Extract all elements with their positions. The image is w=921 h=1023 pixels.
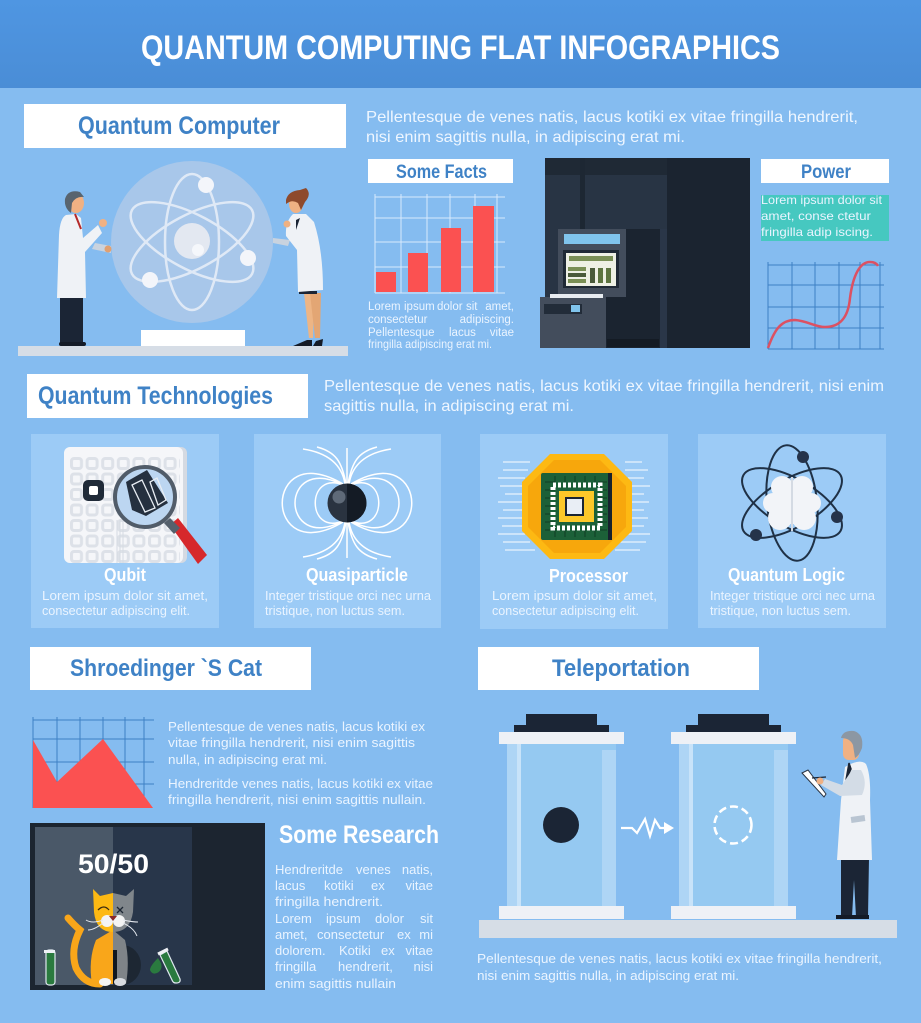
illustration: teleportation chambers (479, 714, 897, 938)
line chart: power (768, 262, 884, 349)
text: some facts: lacus (449, 327, 476, 339)
text: some research: venes (356, 862, 391, 877)
panel: qubit (31, 434, 219, 628)
text: technologies intro (324, 378, 884, 415)
text: some research: fringilla hendrerit. (275, 894, 383, 909)
icon: half alive cat (68, 889, 141, 986)
text: quantum computer intro: Pellentesque de venes natis, lacus kotiki ex vitae fringilla hendrerit, (366, 109, 858, 126)
text: qubit description: Lorem ipsum dolor sit amet, (42, 588, 208, 603)
heading: Some Facts: Some Facts (396, 162, 487, 183)
text: some research: enim sagittis nullain (275, 976, 396, 991)
text: some research: vitae (406, 943, 433, 958)
text: some research: vitae (406, 878, 433, 893)
text: quantum logic description: Integer tristique orci nec urna (710, 588, 876, 603)
text: some research: ex (371, 878, 385, 893)
heading: Teleportation (478, 647, 759, 690)
text: some research: ex (397, 927, 411, 942)
heading: Some Research: Some Research (279, 821, 439, 849)
text: technologies intro: sagittis nulla, in adipiscing erat mi. (324, 398, 574, 415)
chamber with particle (499, 714, 624, 919)
text: some facts: sit (466, 301, 478, 313)
text: some research: ex (381, 943, 395, 958)
text: cat description: vitae fringilla hendrerit, nisi enim sagittis (168, 735, 416, 750)
callout: power text (761, 193, 889, 241)
heading: Quantum Technologies (27, 374, 308, 418)
text: quantum logic description (710, 588, 876, 618)
text: some facts: Pellentesque (368, 327, 434, 339)
text: quantum computer intro: nisi enim sagittis nulla, in adipiscing erat mi. (366, 129, 685, 146)
illustration: quantum machine (540, 158, 750, 348)
text: some facts: consectetur (368, 314, 428, 326)
text: some facts: amet, (485, 301, 514, 313)
text: qubit description (42, 588, 208, 618)
arrow: teleport signal (621, 819, 674, 836)
terminal (558, 229, 626, 297)
text: quasiparticle description: tristique, non luctus sem. (265, 603, 405, 618)
text: some research: dolor (375, 911, 405, 926)
chamber with dashed outline (671, 714, 796, 919)
heading: Teleportation: Teleportation (552, 655, 690, 682)
text: some research: Lorem (275, 911, 312, 926)
callout: power text: Lorem ipsum dolor sit (761, 193, 883, 207)
area chart (33, 717, 154, 808)
heading: Quantum Computer: Quantum Computer (78, 112, 280, 140)
label: Quasiparticle: Quasiparticle (306, 565, 408, 585)
heading: Power: Power (801, 162, 852, 183)
text: processor description: Lorem ipsum dolor sit amet, (492, 588, 657, 603)
text: some research: hendrerit, (338, 959, 393, 974)
text: cat description: fringilla hendrerit, nisi enim sagittis nullain. (168, 792, 426, 807)
panel: processor (480, 434, 668, 629)
text: cat description (168, 719, 433, 807)
text: some facts: vitae (490, 327, 514, 339)
label: Processor: Processor (549, 566, 628, 586)
text: teleportation description: nisi enim sagittis nulla, in adipiscing erat mi. (477, 968, 739, 983)
text: some facts: fringilla adipiscing erat mi. (368, 337, 492, 351)
text: some research: consectetur (317, 927, 385, 942)
text: some research: natis, (402, 862, 433, 877)
icon: qubit chip under magnifier (64, 447, 207, 565)
text: some research: Hendreritde (275, 862, 343, 877)
text: processor description (492, 588, 657, 618)
text: quasiparticle description: Integer tristique orci nec urna (265, 588, 432, 603)
text: some research: Kotiki (339, 943, 371, 958)
heading: Shroedinger's Cat: Shroedinger `S Cat (70, 655, 262, 682)
text: some facts (368, 301, 514, 351)
text: some research: amet, (275, 927, 308, 942)
text: some research: lacus (275, 878, 306, 893)
heading: Power (761, 159, 889, 183)
text: some facts: ipsum (404, 301, 435, 313)
title: QUANTUM COMPUTING FLAT INFOGRAPHICS (141, 29, 780, 67)
text: processor description: consectetur adipiscing elit. (492, 603, 639, 618)
man scientist (57, 191, 112, 346)
bar chart: some facts (375, 194, 505, 293)
text: some facts: adipiscing. (460, 314, 514, 326)
scientist with tablet (802, 731, 872, 919)
text: some research (275, 862, 433, 991)
text: some research: fringilla (275, 959, 317, 974)
text: some research: nisi (413, 959, 433, 974)
illustration: cat in box (30, 823, 265, 990)
woman scientist (273, 188, 323, 346)
text: quasiparticle description (265, 588, 432, 618)
text: some research: ipsum (326, 911, 361, 926)
label: Qubit: Qubit (104, 565, 146, 585)
text: some facts: Lorem (368, 301, 401, 313)
heading: Some Facts (368, 159, 513, 183)
callout: power text: fringilla adip iscing. (761, 225, 873, 239)
callout: power text: amet, conse ctetur (761, 209, 871, 223)
icon: atom with brain (732, 443, 852, 563)
text: some research: sit (420, 911, 433, 926)
panel: quasiparticle (254, 434, 441, 628)
text: qubit description: consectetur adipiscing elit. (42, 603, 190, 618)
illustration: scientists with atom globe (18, 161, 348, 356)
icon: processor chip (498, 454, 650, 559)
label: 50/50: 50/50 (78, 849, 149, 879)
panel: quantum logic (698, 434, 886, 628)
text: quantum logic description: tristique, non luctus sem. (710, 603, 851, 618)
text: teleportation description (477, 951, 882, 983)
heading: Quantum Computer (24, 104, 346, 148)
icon: spilled test tube (150, 949, 180, 983)
text: quantum computer intro (366, 109, 858, 146)
heading: Shroedinger's Cat (30, 647, 311, 690)
header banner (0, 0, 921, 88)
text: cat description: Hendreritde venes natis, lacus kotiki ex vitae (168, 776, 433, 791)
label: Quantum Logic: Quantum Logic (728, 565, 845, 585)
text: cat description: Pellentesque de venes natis, lacus kotiki ex (168, 719, 426, 734)
text: cat description: nulla, in adipiscing erat mi. (168, 752, 327, 767)
text: some facts: dolor (437, 301, 463, 313)
text: some research: mi (419, 927, 433, 942)
text: some research: dolorem. (275, 943, 326, 958)
heading: Quantum Technologies: Quantum Technologies (38, 382, 273, 410)
icon: upright test tube (44, 950, 55, 985)
icon: particle with field lines (282, 447, 412, 559)
text: technologies intro: Pellentesque de venes natis, lacus kotiki ex vitae fringilla hendrerit, nisi enim (324, 378, 884, 395)
text: some research: kotiki (324, 878, 354, 893)
text: teleportation description: Pellentesque de venes natis, lacus kotiki ex vitae fringilla hendrerit, (477, 951, 882, 966)
